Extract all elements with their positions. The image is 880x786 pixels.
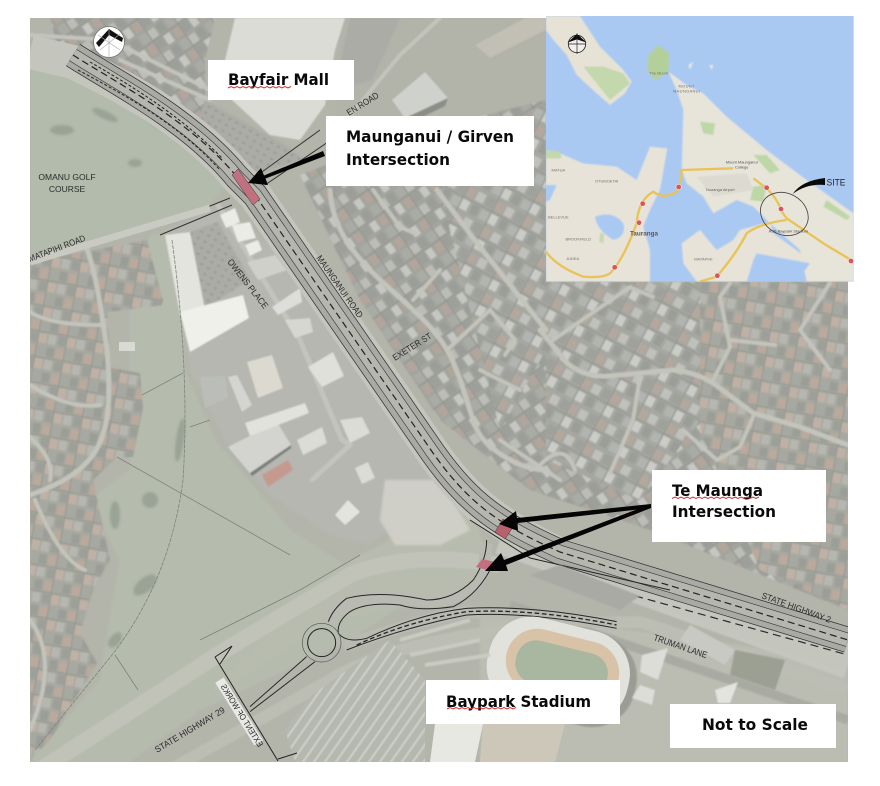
State Highway 29 corridor <box>40 540 848 770</box>
stadium carpark strips <box>400 620 490 665</box>
map label: Owens Place: OWENS PLACE <box>225 257 270 311</box>
map label: State Highway 2: STATE HIGHWAY 2 <box>760 590 832 625</box>
callout: Not to Scale <box>670 704 836 748</box>
field boundaries <box>35 240 360 750</box>
top middle commercial area <box>330 18 546 180</box>
sand fill area <box>380 480 470 545</box>
callout: Te Maunga Intersection: Te Maunga <box>672 481 763 500</box>
callout: Maunganui / Girven Intersection: Maunganui / Girven <box>346 127 514 146</box>
golf course green <box>30 60 225 258</box>
industrial buildings <box>165 208 375 525</box>
map label: Matapihi Road: MATAPIHI ROAD <box>27 233 87 264</box>
industrial estate ground <box>165 205 440 545</box>
locator map place labels: ASB Baypark Stadium <box>769 228 809 233</box>
stadium building <box>430 724 483 762</box>
site pointer and label <box>793 178 845 194</box>
highway alignment Maunganui Road <box>30 52 848 655</box>
locator map place labels: Tauranga <box>630 230 658 237</box>
callout: Not to Scale: Not to Scale <box>702 715 808 734</box>
locator map place labels: MATUA <box>552 168 565 173</box>
site pointer and label: SITE <box>827 178 845 188</box>
callout: Te Maunga Intersection: Intersection <box>672 502 776 521</box>
tree clusters <box>50 105 187 650</box>
map label: Girven Road: EN ROAD <box>345 90 381 118</box>
supermarket roof <box>392 72 448 118</box>
side road tie-ins Matapihi and Girven <box>160 130 328 235</box>
roundabout and interchange loops <box>250 540 617 712</box>
callout: Baypark Stadium <box>426 680 620 724</box>
callout: Bayfair Mall <box>208 60 354 100</box>
locator map place labels: OTUMOETAI <box>595 178 618 183</box>
locator map land masses <box>546 16 854 282</box>
stadium carpark <box>285 640 425 762</box>
arrow: to Te Maunga south intersection <box>485 504 651 571</box>
locator map place labels: MAUNGANUI <box>673 89 700 94</box>
locator map place labels: Mount Maunganui <box>726 159 758 164</box>
map label: Maunganui Road: MAUNGANUI ROAD <box>314 253 365 320</box>
map label: Truman Lane: TRUMAN LANE <box>652 632 709 660</box>
map label: Omanu Golf Course: OMANU GOLF <box>38 172 96 182</box>
shopping mall roofs <box>195 18 546 175</box>
motorway interchange field <box>200 500 490 700</box>
locator map place labels: MOUNT <box>679 83 695 88</box>
stadium <box>486 616 638 728</box>
locator map place labels: JUDEA <box>566 256 580 261</box>
icon: inset north arrow <box>567 33 587 54</box>
locator map place labels: MATAPIHI <box>694 257 712 262</box>
Truman Lane buildings <box>530 565 785 705</box>
intersection highlight: Te Maunga <box>495 519 513 539</box>
map label: Exeter St: EXETER ST <box>391 331 434 363</box>
large warehouse <box>228 422 291 473</box>
callout: Te Maunga Intersection <box>652 470 826 542</box>
callout: Bayfair Mall: Bayfair Mall <box>228 70 329 89</box>
panel: locator map inset <box>546 16 854 282</box>
bottom right ground <box>480 610 848 762</box>
callout: Baypark Stadium: Baypark Stadium <box>446 692 591 711</box>
locator map place labels: College <box>735 164 749 169</box>
sand lot <box>480 724 565 762</box>
callout: Maunganui / Girven Intersection: Intersection <box>346 150 450 169</box>
field court <box>119 342 135 351</box>
arrow: to Maunganui / Girven intersection <box>248 151 325 185</box>
icon: north arrow <box>94 26 124 58</box>
aerial blurred ground cover <box>379 478 471 546</box>
locator map highway shields <box>612 184 854 278</box>
map label: State Highway 29: STATE HIGHWAY 29 <box>153 705 227 755</box>
intersection highlight: Maunganui / Girven <box>232 169 260 205</box>
locator map state highways <box>546 168 854 282</box>
locator map place labels: The Mount <box>649 70 669 75</box>
locator map place labels: BROOKFIELD <box>565 237 591 242</box>
green field centre <box>30 230 470 762</box>
locator map place labels <box>548 70 809 262</box>
extent of works marker <box>215 646 297 761</box>
extent of works marker: EXTENT OF WORKS <box>218 682 265 749</box>
locator map place labels: BELLEVUE <box>548 214 569 219</box>
intersection highlight: Te Maunga south <box>476 559 495 570</box>
arrow: to Te Maunga north intersection <box>499 504 651 531</box>
callout: Maunganui / Girven Intersection <box>326 116 534 186</box>
locator map site circle <box>753 184 816 244</box>
map label: Omanu Golf Course: COURSE <box>49 184 86 194</box>
locator map place labels: Tauranga Airport <box>705 187 736 192</box>
